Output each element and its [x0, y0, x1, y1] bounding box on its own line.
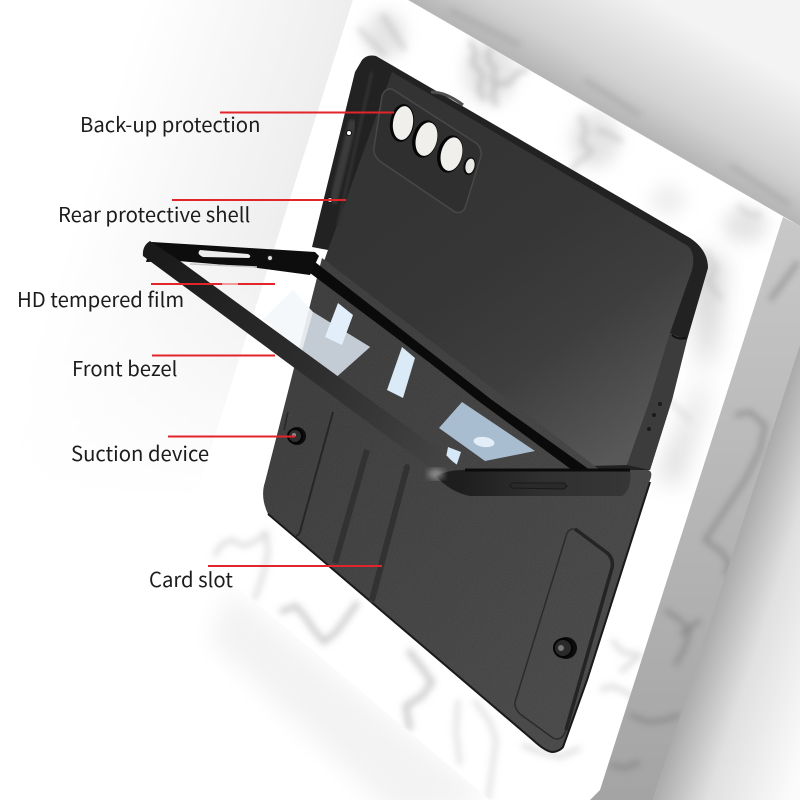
label: rear protective shell: Rear protective shell	[58, 198, 250, 228]
lens 3	[433, 133, 467, 175]
callout lines	[151, 112, 394, 566]
flash	[462, 156, 477, 176]
marble side edges	[450, 10, 800, 800]
bottom bar	[436, 470, 630, 496]
right pocket	[515, 529, 612, 739]
bezel rail right	[310, 262, 590, 470]
label: front bezel: Front bezel	[72, 352, 177, 382]
label: card slot: Card slot	[149, 563, 233, 593]
suction device top	[288, 427, 306, 445]
selfie hole	[268, 256, 272, 260]
lens 2	[408, 118, 442, 160]
soft shadow of the shell	[660, 250, 724, 486]
bezel top side	[146, 242, 319, 275]
panel: rear protective shell	[312, 56, 708, 476]
suction device bottom	[554, 637, 577, 659]
shell back surface	[318, 72, 693, 466]
marble board	[182, 0, 783, 800]
shell side rim	[627, 333, 687, 470]
speaker slot	[199, 250, 250, 258]
camera island	[374, 89, 481, 212]
label: back-up protection: Back-up protection	[80, 108, 260, 138]
panel: lower cover with card slot	[255, 255, 655, 755]
left pocket outline	[296, 412, 333, 536]
lens 1	[387, 103, 417, 143]
bezel left long side	[143, 241, 631, 496]
label: HD tempered film: HD tempered film	[17, 283, 184, 313]
glass reflections	[262, 290, 535, 470]
side button	[510, 483, 567, 489]
card slot grooves	[335, 450, 367, 563]
label: suction device: Suction device	[71, 437, 209, 467]
panel: front bezel	[143, 241, 631, 496]
